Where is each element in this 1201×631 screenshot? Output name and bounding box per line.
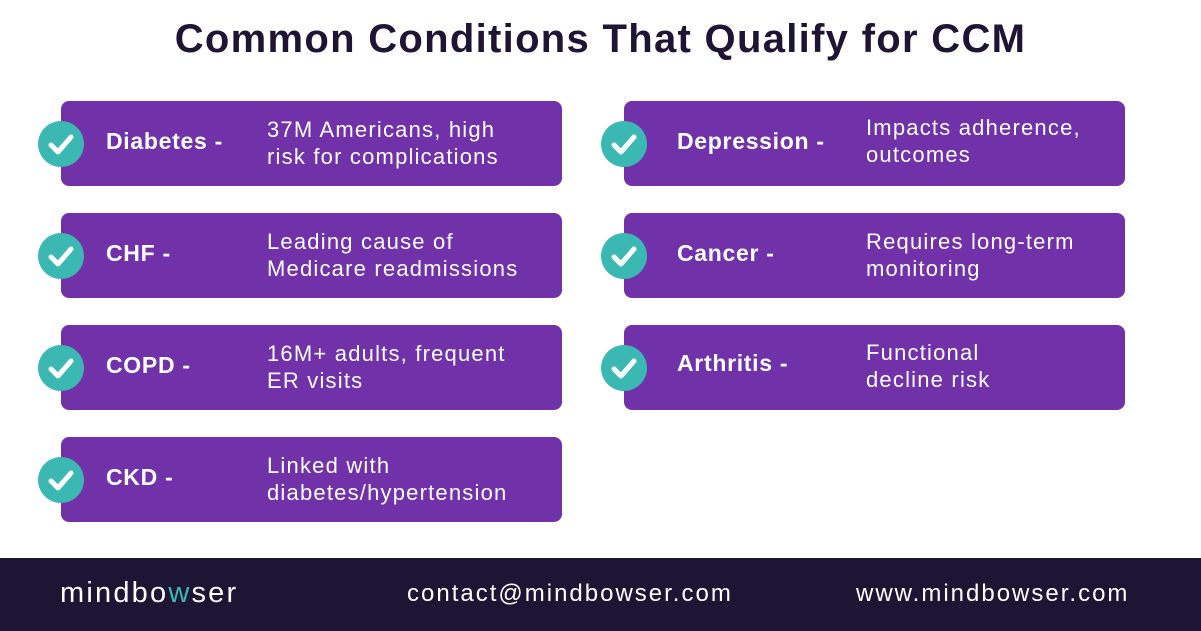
card: cancer: Requires long-term [866, 229, 1075, 254]
card: CKD [61, 437, 562, 522]
card: CKD: Linked with [267, 453, 390, 478]
card: diabetes [61, 101, 562, 186]
card: COPD: COPD - [106, 352, 191, 378]
card: CHF: Medicare readmissions [267, 256, 518, 281]
logo: mindbowser [60, 577, 238, 609]
card: COPD: ER visits [267, 368, 363, 393]
contact email: contact@mindbowser.com [407, 580, 733, 607]
footer [0, 558, 1201, 631]
card: diabetes: 37M Americans, high [267, 117, 495, 142]
card: CHF [61, 213, 562, 298]
card: arthritis: decline risk [866, 367, 990, 392]
card: cancer: monitoring [866, 256, 981, 281]
card: cancer: Cancer - [677, 240, 775, 266]
card: COPD [61, 325, 562, 410]
card: CHF: CHF - [106, 240, 171, 266]
card: arthritis: Functional [866, 340, 980, 365]
card: CHF: Leading cause of [267, 229, 454, 254]
title: Common Conditions That Qualify for CCM [175, 17, 1026, 61]
card: arthritis [624, 325, 1125, 410]
card: diabetes: Diabetes - [106, 128, 223, 154]
card: depression [624, 101, 1125, 186]
card: arthritis: Arthritis - [677, 350, 788, 376]
card: depression: Impacts adherence, [866, 115, 1081, 140]
website: www.mindbowser.com [856, 580, 1129, 607]
card: diabetes: risk for complications [267, 144, 499, 169]
card: depression: Depression - [677, 128, 825, 154]
card: COPD: 16M+ adults, frequent [267, 341, 506, 366]
card: CKD: CKD - [106, 464, 173, 490]
card: cancer [624, 213, 1125, 298]
card: CKD: diabetes/hypertension [267, 480, 507, 505]
card: depression: outcomes [866, 142, 971, 167]
